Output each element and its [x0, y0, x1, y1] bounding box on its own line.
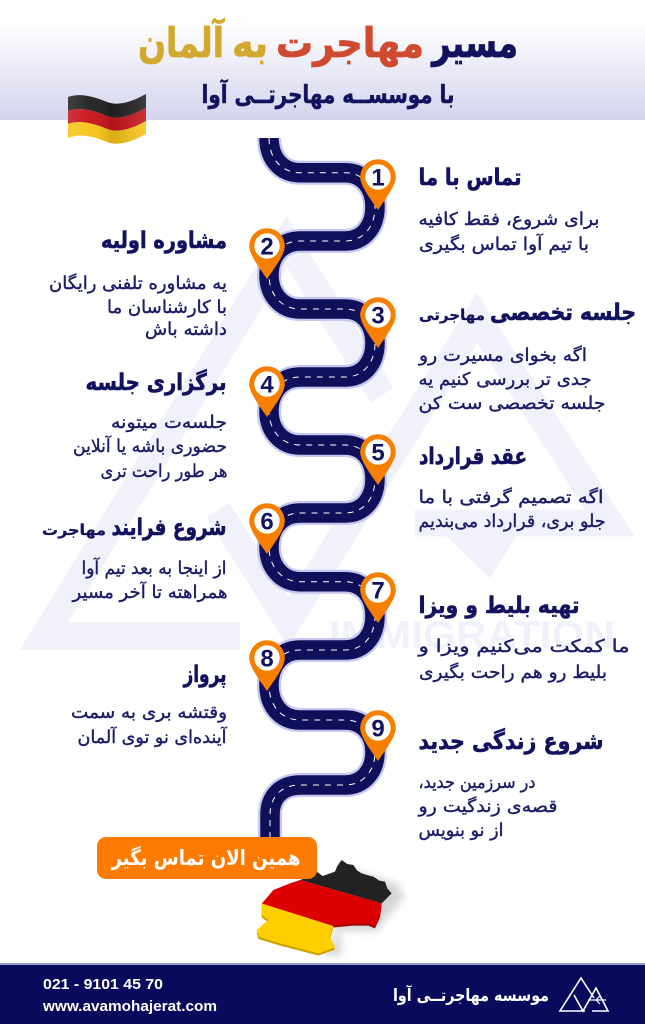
pin 4: [249, 366, 285, 417]
step 4 text: حضوری باشه یا آنلاین: [73, 435, 227, 457]
pin 3: [360, 297, 396, 348]
step 6 text: از اینجا به بعد تیم آوا: [82, 557, 226, 579]
pin 6: 6: [260, 508, 274, 536]
step 8 text: وقتشه بری به سمت: [71, 703, 227, 723]
step 8 text: [71, 662, 228, 748]
step 6 text: همراهته تا آخر مسیر: [71, 581, 228, 603]
step 2 text: با کارشناسان ما: [107, 298, 227, 318]
pin 2: [249, 228, 285, 279]
step 2 text: داشته باش: [145, 320, 227, 340]
pin 1: [360, 159, 396, 210]
pin 9: 9: [371, 716, 385, 742]
step 4 text: [73, 369, 228, 482]
step 1 text: تماس با ما: [418, 165, 522, 191]
title: [138, 18, 518, 67]
pin 9: [360, 710, 396, 761]
step 9 text: [417, 728, 604, 841]
step 5 text: جلو بری، قرارداد می‌بندیم: [418, 512, 606, 532]
pin 7: 7: [371, 578, 385, 604]
step 3 text: [418, 300, 636, 414]
map of Germany: [257, 860, 405, 957]
header band: [0, 22, 645, 120]
step 7 text: بلیط رو هم راحت بگیری: [419, 662, 607, 683]
step 2 text: [49, 228, 227, 340]
footer logo: [560, 978, 608, 1011]
pin 8: [249, 640, 285, 691]
step 1 text: [418, 165, 600, 255]
step 2 text: یه مشاوره تلفنی رایگان: [49, 273, 227, 294]
footer: [0, 963, 645, 1024]
title: به: [232, 19, 268, 67]
step 9 text: قصه‌ی زندگیت رو: [417, 796, 558, 817]
step 6 text: مهاجرت: [42, 521, 106, 539]
step 3 text: اگه بخوای مسیرت رو: [418, 345, 587, 366]
pin 7: [360, 572, 396, 623]
footer phone number: 021 - 9101 45 70: [43, 977, 163, 993]
call to action button: [97, 837, 317, 879]
icon: German flag: [68, 94, 146, 144]
title: آلمان: [138, 18, 225, 67]
footer website: www.avamohajerat.com: [42, 999, 217, 1015]
step 1 text: با تیم آوا تماس بگیری: [419, 233, 589, 255]
step 8 text: آینده‌ای نو توی آلمان: [78, 726, 228, 748]
step 7 text: ما کمکت می‌کنیم ویزا و: [417, 637, 630, 657]
pin 1: 1: [371, 164, 385, 192]
pin 3: 3: [371, 302, 385, 330]
pin 5: 5: [371, 440, 385, 466]
step 1 text: برای شروع، فقط کافیه: [418, 210, 600, 230]
step 3 text: مهاجرتی: [419, 306, 485, 324]
pin 5: [360, 434, 396, 485]
winding road: [269, 138, 375, 838]
step 4 text: جلسه‌ت میتونه: [111, 413, 227, 433]
step 9 text: از نو بنویس: [418, 821, 504, 841]
step 3 text: جلسه تخصصی ست کن: [418, 394, 606, 414]
title: مهاجرت: [276, 19, 424, 67]
pin 4: 4: [260, 372, 274, 398]
call to action button: همین الان تماس بگیر: [111, 845, 300, 870]
footer institute name: موسسه مهاجرتــی آوا: [393, 984, 549, 1006]
step 5 text: [418, 444, 606, 532]
step 7 text: تهیه بلیط و ویزا: [418, 593, 580, 619]
step 7 text: [417, 593, 630, 683]
step 4 text: برگزاری جلسه: [86, 369, 226, 396]
step 9 text: در سرزمین جدید،: [418, 773, 536, 793]
pin 8: 8: [260, 646, 274, 672]
step 3 text: جدی تر بررسی کنیم یه: [418, 370, 592, 390]
step 9 text: شروع زندگی جدید: [418, 728, 604, 755]
step 4 text: هر طور راحت تری: [100, 462, 228, 482]
title: مسیر: [430, 19, 518, 67]
step 8 text: پرواز: [183, 662, 226, 688]
subtitle: با موسســه مهاجرتــی آوا: [202, 79, 454, 110]
step 6 text: شروع فرایند: [112, 515, 226, 541]
step 5 text: اگه تصمیم گرفتی با ما: [418, 487, 604, 508]
pin 6: [249, 503, 285, 554]
background watermark logo: IMMIGRATION: [329, 614, 615, 657]
step 5 text: عقد قرارداد: [419, 444, 527, 470]
pin 2: 2: [260, 234, 274, 260]
step 2 text: مشاوره اولیه: [101, 228, 227, 254]
step 6 text: [42, 515, 228, 603]
background watermark logo: [44, 242, 615, 657]
